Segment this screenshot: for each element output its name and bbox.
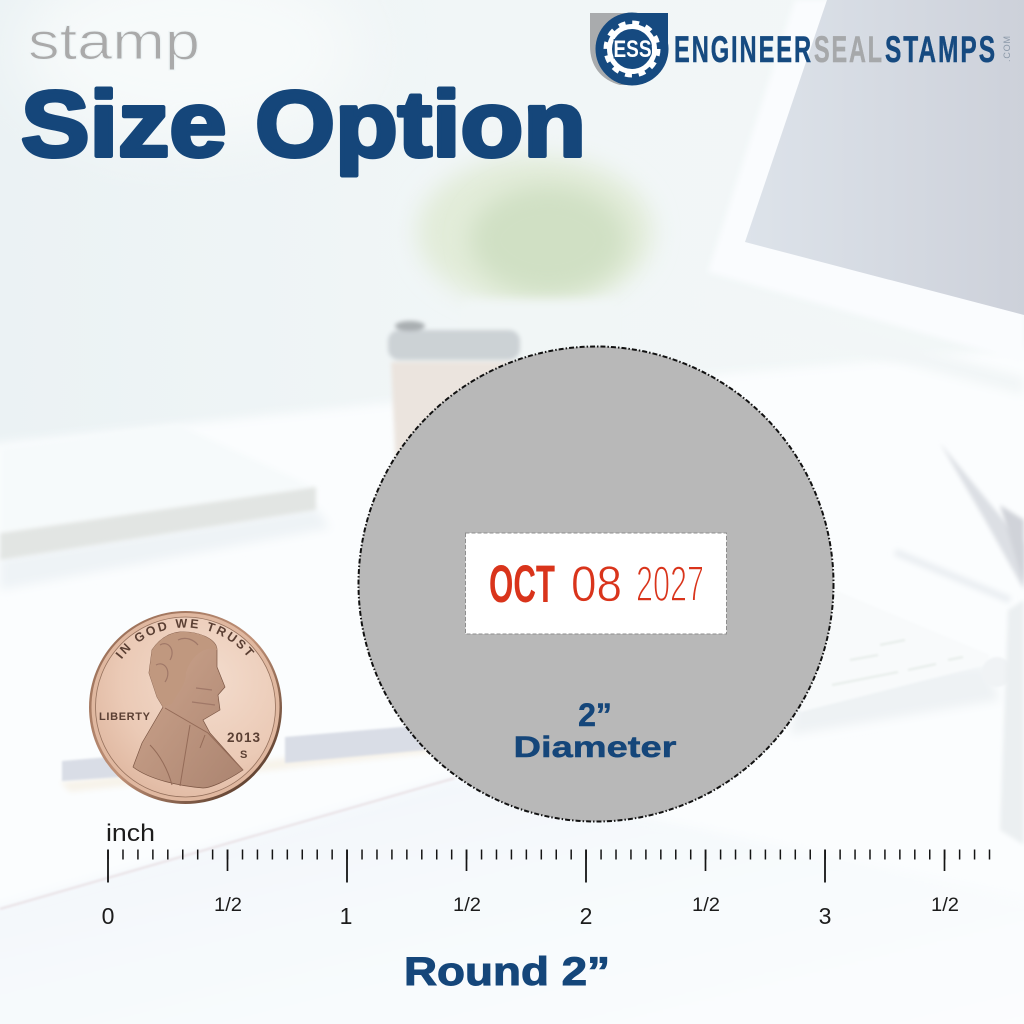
logo .com suffix: .COM <box>1002 36 1012 62</box>
date text: 2027 <box>636 556 704 612</box>
logo wordmark: ENGINEER <box>674 29 813 70</box>
background: notebook <box>0 425 330 590</box>
coin inscriptions: S <box>240 749 247 761</box>
date text <box>489 555 704 614</box>
ruler numbers: 2 <box>580 903 592 929</box>
ruler numbers <box>102 895 959 929</box>
ruler numbers: 1/2 <box>692 895 720 916</box>
logo wordmark: SEAL <box>814 29 884 70</box>
date text: 08 <box>571 556 622 612</box>
ruler numbers: 3 <box>819 903 831 929</box>
diameter label <box>514 697 677 764</box>
ruler ticks <box>107 850 991 882</box>
logo emblem: gear with ESS: ESS <box>614 36 652 63</box>
ruler numbers: 1 <box>340 903 352 929</box>
coin inscriptions <box>99 618 260 761</box>
coin inscriptions: 2013 <box>227 730 260 745</box>
ruler <box>102 820 991 929</box>
ruler numbers: 1/2 <box>931 895 959 916</box>
diameter label: Diameter <box>514 731 677 764</box>
date text: OCT <box>489 555 555 614</box>
logo: Engineer Seal Stamps <box>590 12 1012 86</box>
background: keyboard <box>790 590 1012 735</box>
ruler unit label: inch <box>106 820 155 847</box>
heading: Size Option: Size Option <box>21 72 586 176</box>
background: pencils at right <box>895 443 1024 845</box>
panel: 2 inch stamp circle <box>358 346 834 822</box>
stamp impression area <box>466 533 726 634</box>
background: paper and pen <box>0 725 1024 1024</box>
logo wordmark <box>674 29 997 70</box>
background: desk top <box>0 345 1024 1024</box>
caption: Round 2 inch: Round 2” <box>404 950 610 994</box>
Lincoln portrait <box>133 632 243 788</box>
ruler numbers: 1/2 <box>453 895 481 916</box>
ruler numbers: 1/2 <box>214 895 242 916</box>
icon: penny coin <box>89 611 282 804</box>
background: monitor <box>700 0 1024 395</box>
diameter label: 2” <box>578 697 612 733</box>
subheading: stamp: stamp <box>28 13 200 71</box>
ruler numbers: 0 <box>102 903 114 929</box>
background: coffee cup <box>388 321 520 470</box>
coin inscriptions: IN GOD WE TRUST <box>115 618 254 659</box>
background: potted plant <box>417 156 653 360</box>
coin inscriptions: LIBERTY <box>99 711 151 723</box>
logo emblem: gear with ESS <box>590 12 668 86</box>
